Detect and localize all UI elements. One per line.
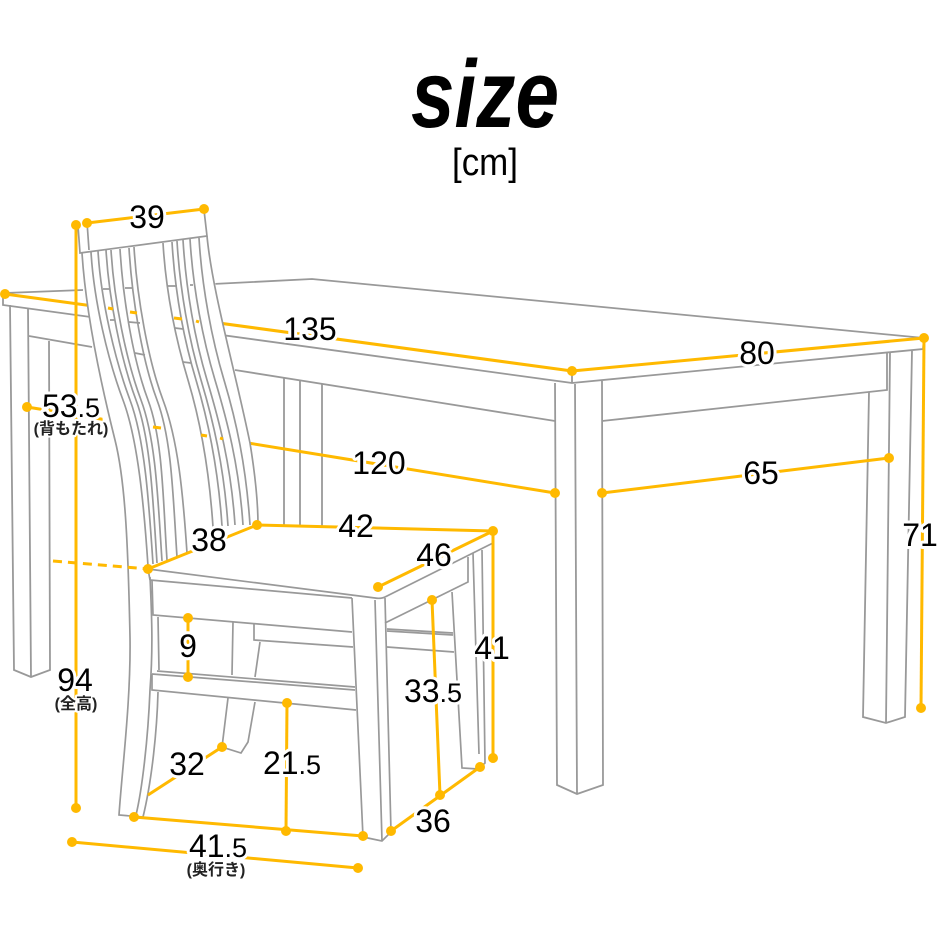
- label: 38: 38: [191, 522, 227, 558]
- label: 21.5: 21.5: [263, 745, 321, 781]
- title: size: [411, 41, 559, 148]
- label: 33.5: 33.5: [404, 673, 462, 709]
- label: overall height: (全高): [55, 694, 97, 713]
- label: 42: 42: [338, 508, 374, 544]
- label: 36: 36: [415, 803, 451, 839]
- label: 53.5: 53.5: [42, 388, 100, 424]
- chair drawing: [78, 210, 493, 841]
- label: depth: (奥行き): [187, 861, 245, 879]
- label: 94: 94: [57, 662, 93, 698]
- label: 65: 65: [743, 455, 779, 491]
- label: 41: 41: [474, 630, 510, 666]
- label: backrest: (背もたれ): [34, 420, 108, 438]
- table dimension lines: [5, 294, 924, 708]
- label: 120: 120: [352, 445, 406, 481]
- unit label: [cm]: [452, 142, 518, 184]
- dimension end dots: [0, 204, 929, 873]
- slat gap dimension fragments: [108, 308, 223, 439]
- label: 46: 46: [416, 537, 452, 573]
- label: 80: 80: [739, 335, 775, 371]
- label: 71: 71: [902, 517, 938, 553]
- chair dimension lines: [53, 209, 493, 868]
- label: 41.5: 41.5: [189, 828, 247, 864]
- label: 135: 135: [283, 311, 337, 347]
- label: 9: 9: [179, 628, 197, 664]
- table drawing: [3, 279, 924, 794]
- label: 39: 39: [129, 199, 165, 235]
- label: 32: 32: [169, 746, 205, 782]
